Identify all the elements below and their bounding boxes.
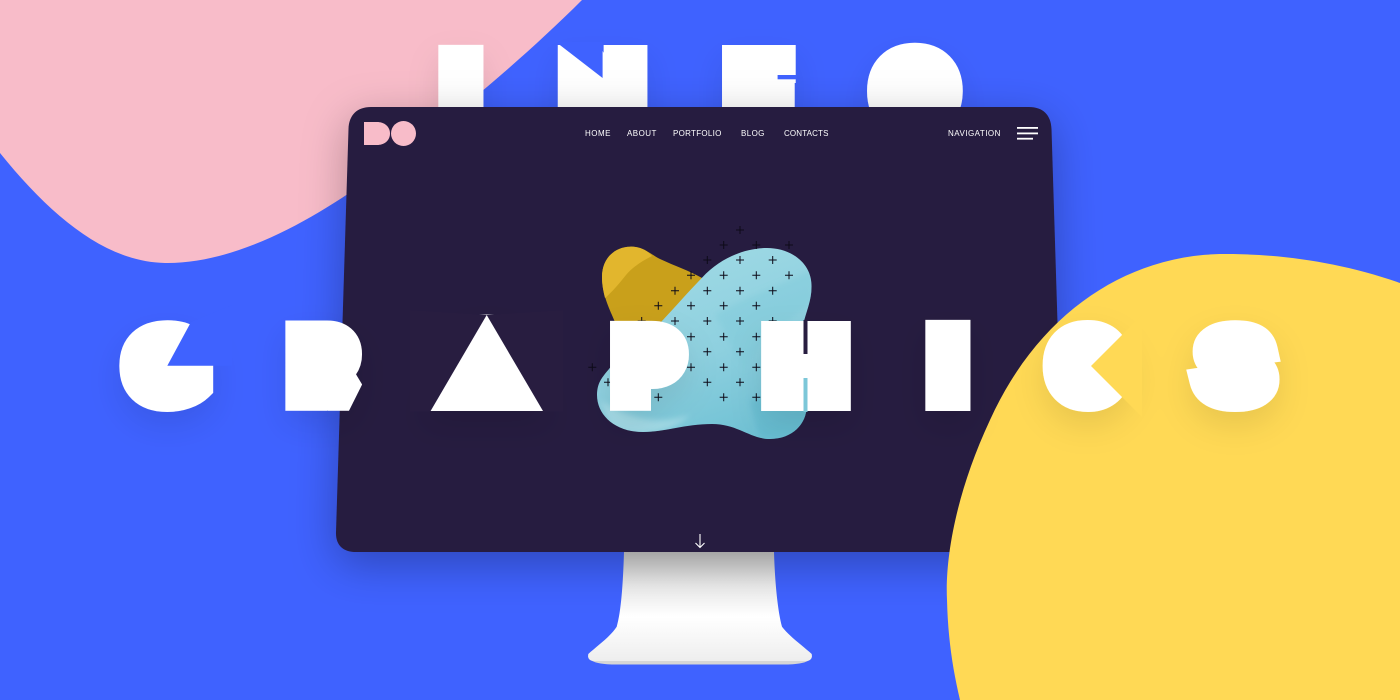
- plus pattern: [588, 226, 793, 401]
- navigation menu: ABOUT: [627, 129, 657, 138]
- monitor stand: [588, 552, 812, 664]
- gap in H: [804, 320, 808, 412]
- notch in F: [778, 75, 797, 79]
- navigation menu: PORTFOLIO: [673, 129, 722, 138]
- navigation menu: BLOG: [741, 129, 765, 138]
- heading: INFO: F: [730, 41, 785, 141]
- ochre blob: [602, 247, 702, 330]
- yellow blob: [947, 254, 1400, 700]
- icon: hamburger menu: [1017, 127, 1038, 140]
- sloped sides of A: [410, 310, 563, 412]
- icon: down arrow: [696, 534, 704, 548]
- navigation menu: NAVIGATION: [948, 129, 1001, 138]
- heading: GRAPHICS: P: [618, 317, 678, 417]
- monitor screen: [336, 107, 1064, 552]
- heading: GRAPHICS: I: [936, 318, 960, 412]
- navigation menu: HOME: [585, 129, 611, 138]
- heading: GRAPHICS: H: [770, 317, 842, 417]
- aqua blob: [597, 248, 815, 440]
- heading: INFO: [449, 41, 948, 141]
- navigation menu: CONTACTS: [784, 129, 829, 138]
- heading: GRAPHICS: R: [296, 321, 350, 412]
- navigation menu: [585, 129, 1001, 138]
- illustration: watercolor blobs with plus pattern: [588, 226, 815, 440]
- heading: GRAPHICS: A: [455, 321, 519, 406]
- heading: GRAPHICS: S: [1202, 317, 1268, 417]
- notch in C: [1091, 315, 1142, 417]
- pink blob: [0, 0, 582, 263]
- heading: GRAPHICS: G: [130, 317, 204, 417]
- heading: INFO: O: [882, 44, 948, 140]
- logo: DO: [364, 121, 416, 146]
- heading: INFO: I: [449, 43, 473, 137]
- heading: GRAPHICS: [130, 317, 1268, 417]
- notch in N: [556, 42, 603, 78]
- heading: INFO: N: [567, 41, 639, 141]
- notch in G: [167, 305, 232, 366]
- heading: GRAPHICS: C: [1056, 321, 1116, 412]
